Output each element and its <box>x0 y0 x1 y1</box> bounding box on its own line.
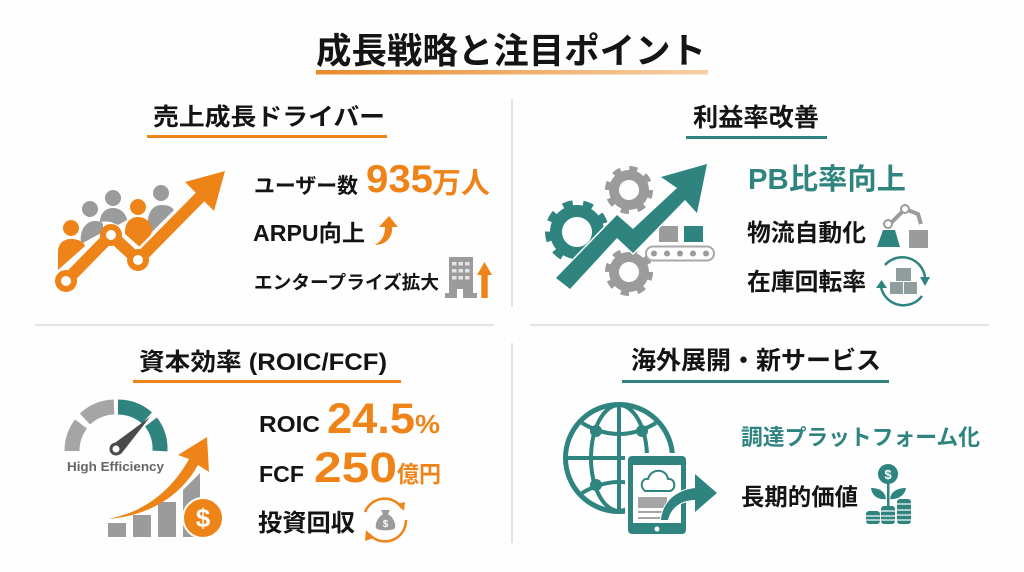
panel: profit margin improvement <box>548 104 930 305</box>
text: logistics automation with robot arm icon <box>747 205 928 248</box>
text: users 9.35 million: ユーザー数 <box>254 175 358 198</box>
text: users 9.35 million <box>254 158 490 201</box>
heading: overseas expansion: 海外展開・新サービス <box>631 347 881 375</box>
icon: users and rising arrow <box>58 171 225 289</box>
text: investment recovery with money bag icon: $ <box>383 519 389 530</box>
text: logistics automation with robot arm icon: 物流自動化 <box>747 220 866 247</box>
icon: gears, conveyor and teal arrow <box>548 164 714 293</box>
text: inventory turnover with cycle icon <box>747 257 930 305</box>
text: enterprise expansion with building icon <box>254 257 492 298</box>
heading: capital efficiency: 資本効率 (ROIC/FCF) <box>139 349 387 376</box>
text: long-term value with plant and coins icon: 長期的価値 <box>741 484 858 510</box>
text: ROIC 24.5 percent: 24.5 <box>327 395 415 443</box>
panel: capital efficiency <box>67 349 441 541</box>
text: users 9.35 million: 万人 <box>432 168 490 200</box>
panel: sales growth drivers <box>58 104 492 298</box>
text: enterprise expansion with building icon: エンタープライズ拡大 <box>254 272 439 293</box>
heading: profit margin: 利益率改善 <box>693 104 819 132</box>
text: ROIC 24.5 percent: ROIC <box>259 411 320 437</box>
text: ARPU up with arrow icon: ARPU向上 <box>253 220 365 246</box>
text: long-term value with plant and coins icon <box>741 464 911 524</box>
text: FCF 25 billion yen: 250 <box>314 444 397 492</box>
text: procurement platform: 調達プラットフォーム化 <box>741 425 980 450</box>
icon: globe, tablet and arrow <box>566 404 717 537</box>
text: ROIC 24.5 percent: % <box>415 409 440 439</box>
title: 成長戦略と注目ポイント <box>316 31 706 71</box>
icon: rising bars, arrow and dollar coin <box>108 437 223 538</box>
icon: rising bars, arrow and dollar coin: $ <box>196 503 211 533</box>
text: PB ratio up: PB比率向上 <box>748 163 906 196</box>
text: users 9.35 million: 935 <box>366 158 433 201</box>
text: FCF 25 billion yen <box>259 444 441 492</box>
text: inventory turnover with cycle icon: 在庫回転率 <box>747 269 866 296</box>
text: investment recovery with money bag icon: 投資回収 <box>258 510 355 537</box>
text: FCF 25 billion yen: 億円 <box>397 461 441 487</box>
icon: efficiency gauge <box>67 407 164 474</box>
text: FCF 25 billion yen: FCF <box>259 461 304 487</box>
text: ROIC 24.5 percent <box>259 395 440 443</box>
icon: efficiency gauge: High Efficiency <box>67 460 164 474</box>
panel: overseas expansion and new services <box>566 347 980 537</box>
heading: sales growth drivers: 売上成長ドライバー <box>153 104 385 131</box>
text: investment recovery with money bag icon <box>258 499 406 541</box>
text: ARPU up with arrow icon <box>253 216 398 246</box>
text: long-term value with plant and coins icon: $ <box>884 467 892 482</box>
heading: capital efficiency <box>133 349 401 383</box>
